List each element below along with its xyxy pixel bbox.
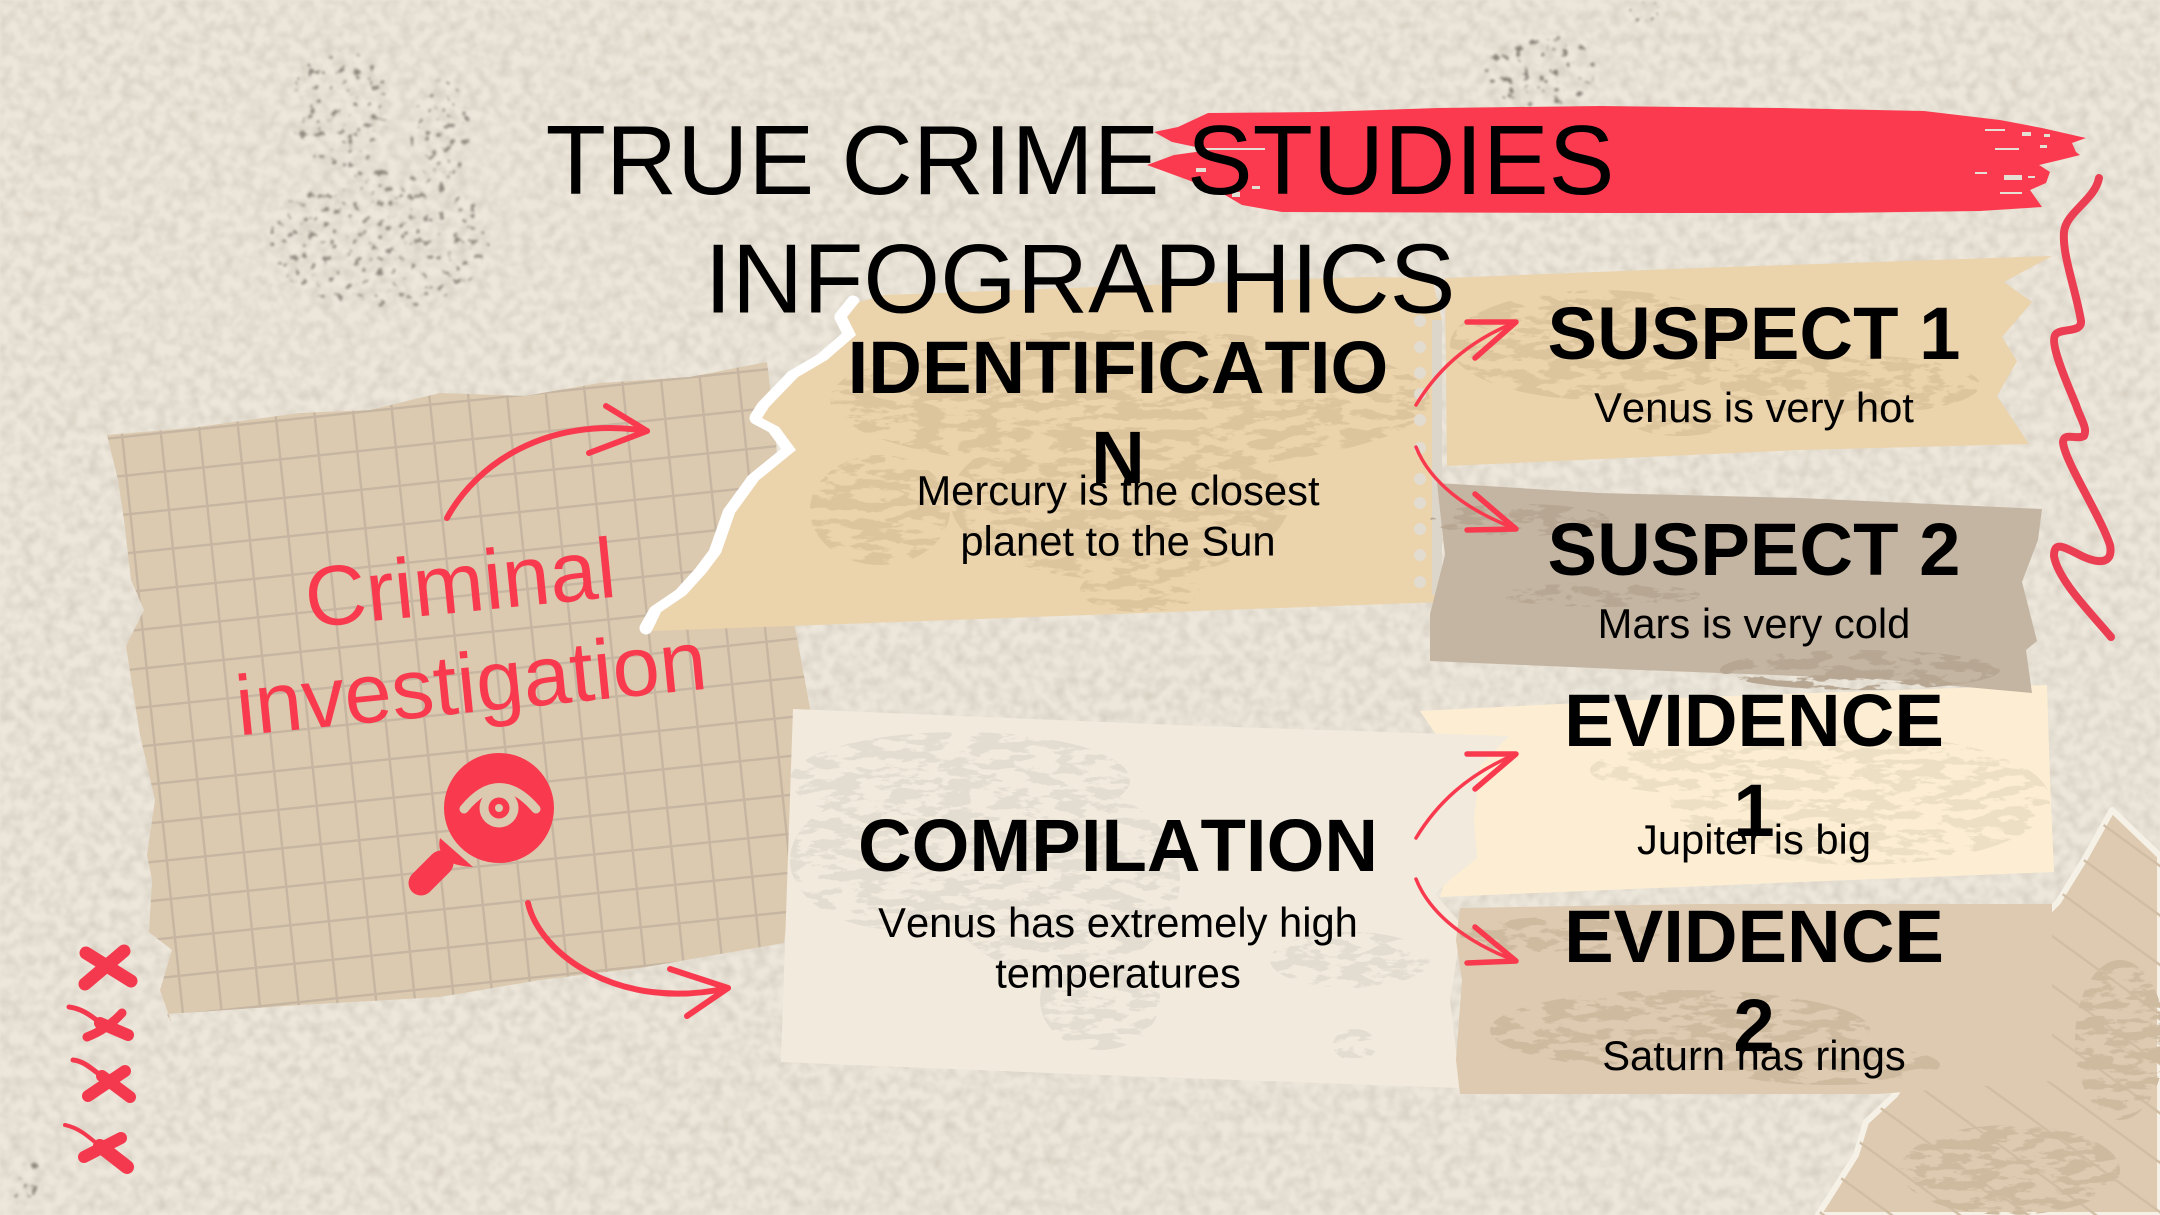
icon: magnifying glass with eye (421, 753, 554, 883)
panel: compilation (781, 709, 1509, 1088)
arrow: to evidence 1 (1416, 754, 1516, 838)
text: mercury: planet to the Sun (960, 518, 1276, 564)
background grunge specks (5, 1, 1672, 1200)
heading: identification: IDENTIFICATIO (848, 326, 1388, 409)
arrow: grid paper to identification (447, 406, 647, 518)
heading: identification: N (1091, 416, 1145, 499)
panel: evidence 2 tape (1456, 904, 2052, 1094)
heading: evidence 1: EVIDENCE (1564, 679, 1944, 762)
red brush stroke behind title (1147, 106, 2086, 213)
red squiggle line (2054, 178, 2111, 637)
panel: suspect 1 tape (1445, 256, 2052, 466)
arrow: grid paper to compilation (528, 903, 728, 1016)
heading: evidence 2: EVIDENCE (1564, 895, 1944, 978)
text: jupiter: Jupiter is big (1637, 816, 1871, 863)
heading: suspect 2: SUSPECT 2 (1548, 508, 1960, 591)
panel: grid paper (90, 350, 830, 1040)
heading: evidence 2: 2 (1733, 984, 1775, 1067)
arrow: to suspect 2 (1416, 447, 1516, 530)
perforated edge (1414, 315, 1442, 595)
text: venus: temperatures (995, 950, 1241, 996)
panel: identification (646, 277, 1442, 631)
label: Criminal investigation (231, 521, 711, 754)
text: mercury: Mercury is the closest (916, 467, 1320, 514)
brush dry-bristle gaps (1196, 129, 2050, 197)
heading: evidence 1: 1 (1733, 769, 1775, 852)
arrow: to evidence 2 (1416, 879, 1516, 963)
heading: compilation: COMPILATION (858, 804, 1378, 887)
label: Criminal investigation: investigation (231, 613, 711, 754)
text: venus: Venus has extremely high (878, 899, 1358, 946)
arrow: to suspect 1 (1416, 322, 1516, 405)
title: TRUE CRIME STUDIES (546, 105, 1614, 215)
label: Criminal investigation: Criminal (300, 521, 620, 646)
title: INFOGRAPHICS (705, 223, 1455, 333)
text: saturn: Saturn has rings (1602, 1032, 1906, 1079)
text: mars: Mars is very cold (1598, 600, 1910, 647)
torn paper: bottom right corner (1818, 810, 2160, 1215)
text: venus hot: Venus is very hot (1594, 384, 1914, 431)
icon: red x marks (65, 951, 131, 1167)
heading: suspect 1: SUSPECT 1 (1548, 292, 1960, 375)
panel: suspect 2 tape (1430, 483, 2042, 693)
identification grunge (810, 330, 1430, 612)
panel: evidence 1 tape (1420, 685, 2054, 897)
